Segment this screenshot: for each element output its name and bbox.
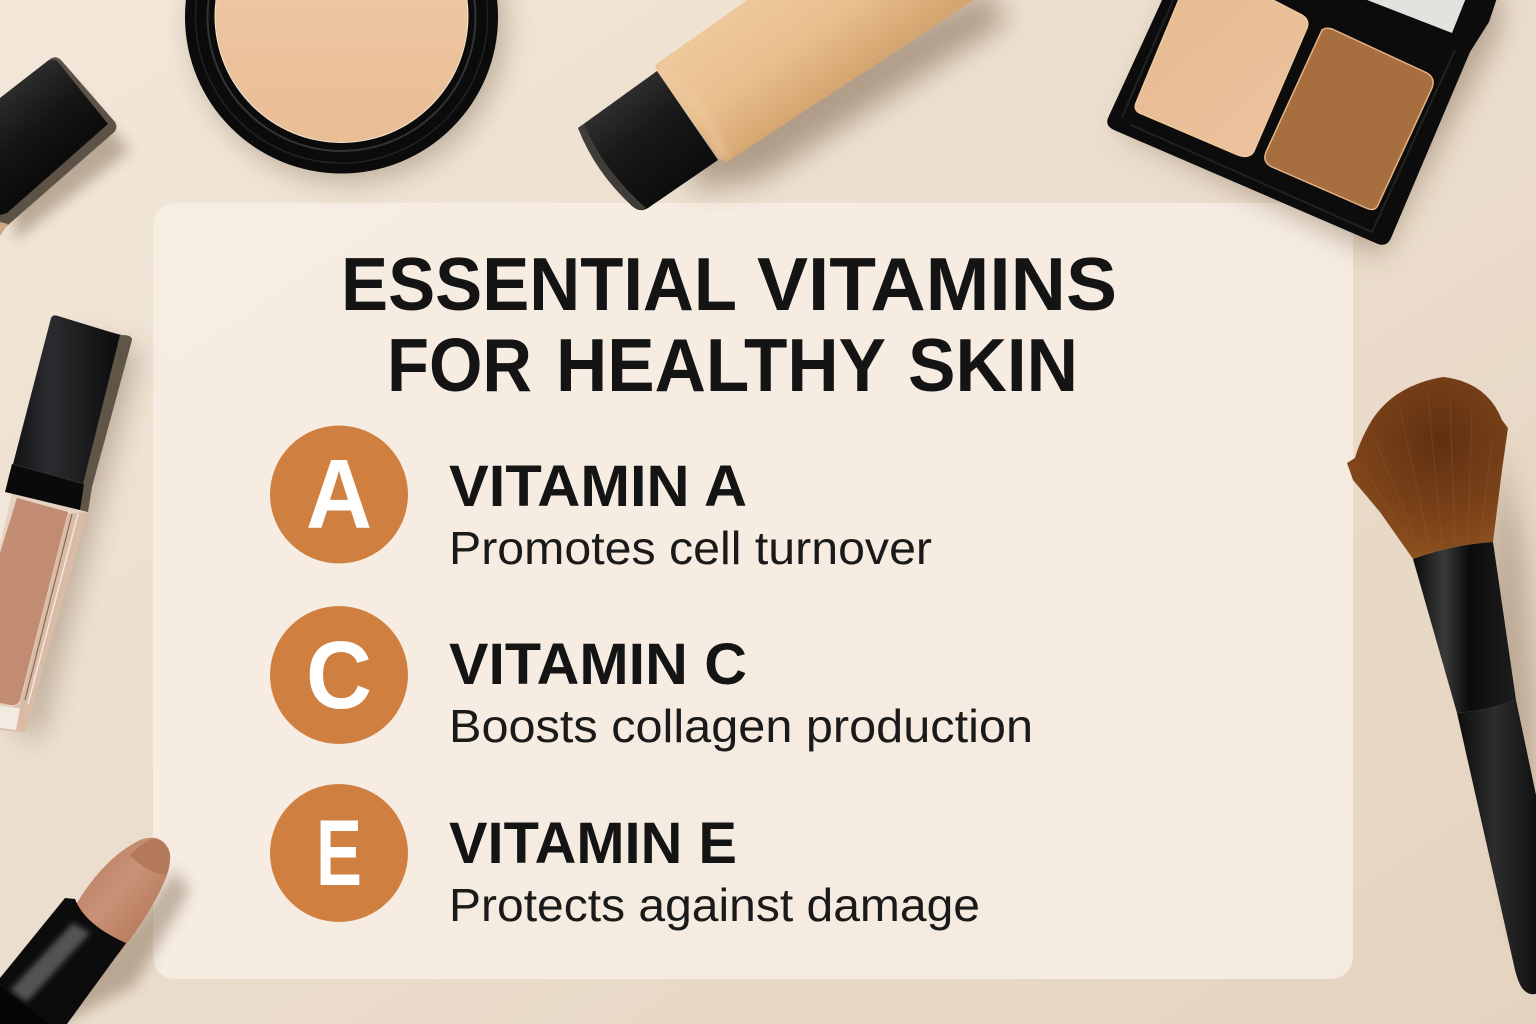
brush handle: [1457, 700, 1536, 994]
title: VITAMINS: [757, 242, 1117, 326]
icon: lipstick cap top left: [0, 57, 130, 240]
item: vitamin C: [270, 606, 1033, 752]
icon: pressed powder compact: [185, 0, 505, 182]
description E: Protects against damage: [449, 879, 980, 931]
heading E: VITAMIN E: [449, 811, 737, 876]
title: [341, 242, 1117, 407]
title: HEALTHY: [556, 323, 886, 407]
icon: lip gloss: [0, 315, 140, 740]
panel: content card: [153, 203, 1353, 979]
title: SKIN: [908, 323, 1078, 407]
title: ESSENTIAL: [341, 242, 737, 326]
badge E: [270, 784, 408, 922]
item: vitamin A: [270, 426, 932, 574]
description C: Boosts collagen production: [449, 700, 1033, 752]
brush bristles: [1347, 377, 1508, 559]
heading A: VITAMIN A: [449, 454, 747, 519]
item: vitamin E: [270, 784, 980, 931]
badge C: C: [306, 622, 372, 729]
brush ferrule: [1413, 542, 1516, 713]
icon: foundation tube: [578, 0, 1010, 210]
icon: lipstick bottom left: [0, 838, 190, 1024]
icon: contour palette: [1107, 0, 1500, 255]
icon: makeup brush: [1347, 377, 1536, 994]
badge E: E: [316, 800, 362, 905]
description A: Promotes cell turnover: [449, 522, 932, 574]
title: FOR: [387, 323, 532, 407]
badge A: A: [306, 439, 372, 549]
badge C: [270, 606, 408, 744]
heading C: VITAMIN C: [449, 632, 747, 697]
badge A: [270, 426, 408, 564]
